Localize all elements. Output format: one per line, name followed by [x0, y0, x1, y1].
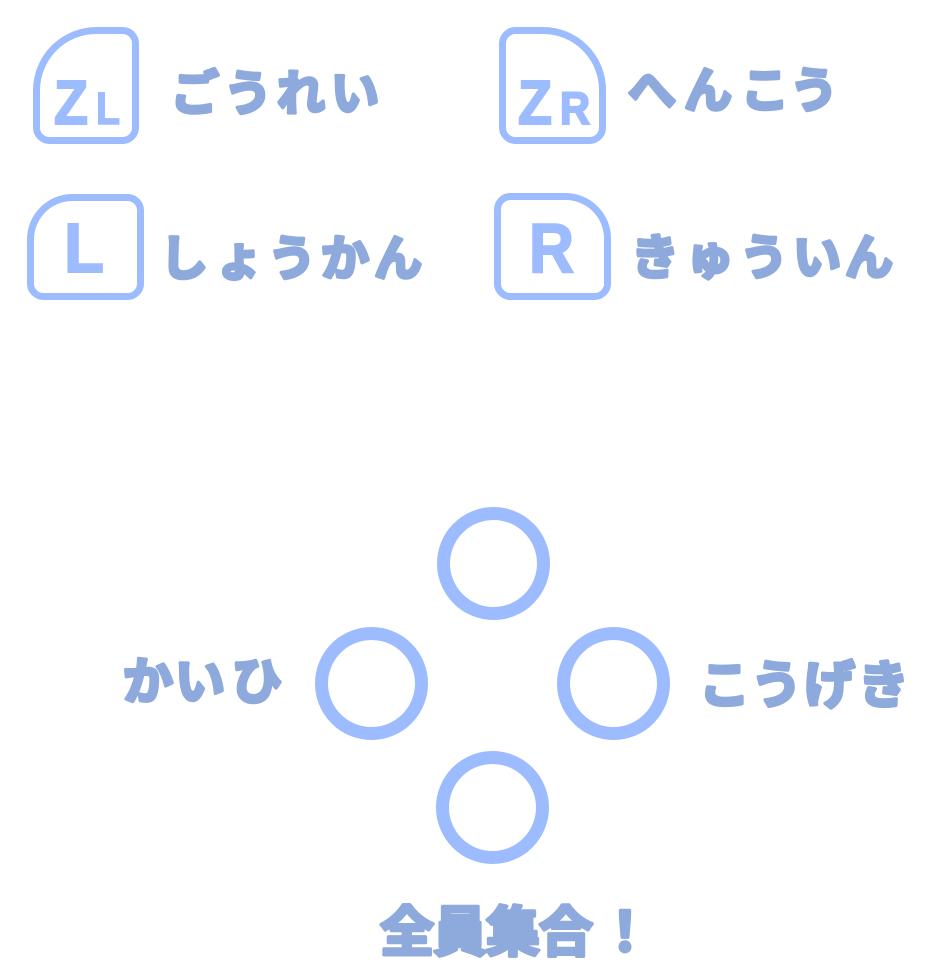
icon: L button [30, 197, 141, 297]
label: L action: しょうかん [160, 233, 422, 286]
label: bottom button action: 全員集合！ [380, 903, 652, 963]
icon: left circle button [322, 634, 422, 734]
panel: R button with label [497, 196, 893, 297]
icon: ZR button: Z [518, 69, 552, 138]
icon: ZR button: R [560, 83, 590, 134]
icon: ZL button [36, 30, 136, 141]
panel: ZR button with label [502, 30, 838, 141]
panel: face button diamond [322, 514, 664, 858]
label: R action: きゅういん [631, 232, 893, 285]
icon: R button [497, 196, 608, 297]
icon: right circle button [564, 634, 664, 734]
icon: ZL button: Z [54, 69, 88, 138]
icon: bottom circle button [442, 758, 542, 858]
label: ZR action: へんこう [628, 65, 838, 118]
label: ZL action: ごうれい [171, 68, 379, 121]
icon: ZR button [502, 30, 603, 141]
panel: L button with label [30, 197, 422, 297]
label: left button action: かいひ [123, 654, 282, 710]
panel: ZL button with label [36, 30, 379, 141]
label: right button action: こうげき [699, 657, 909, 714]
icon: R button: R [529, 209, 574, 287]
icon: ZL button: L [96, 83, 120, 134]
icon: top circle button [444, 514, 544, 614]
icon: L button: L [64, 209, 104, 287]
